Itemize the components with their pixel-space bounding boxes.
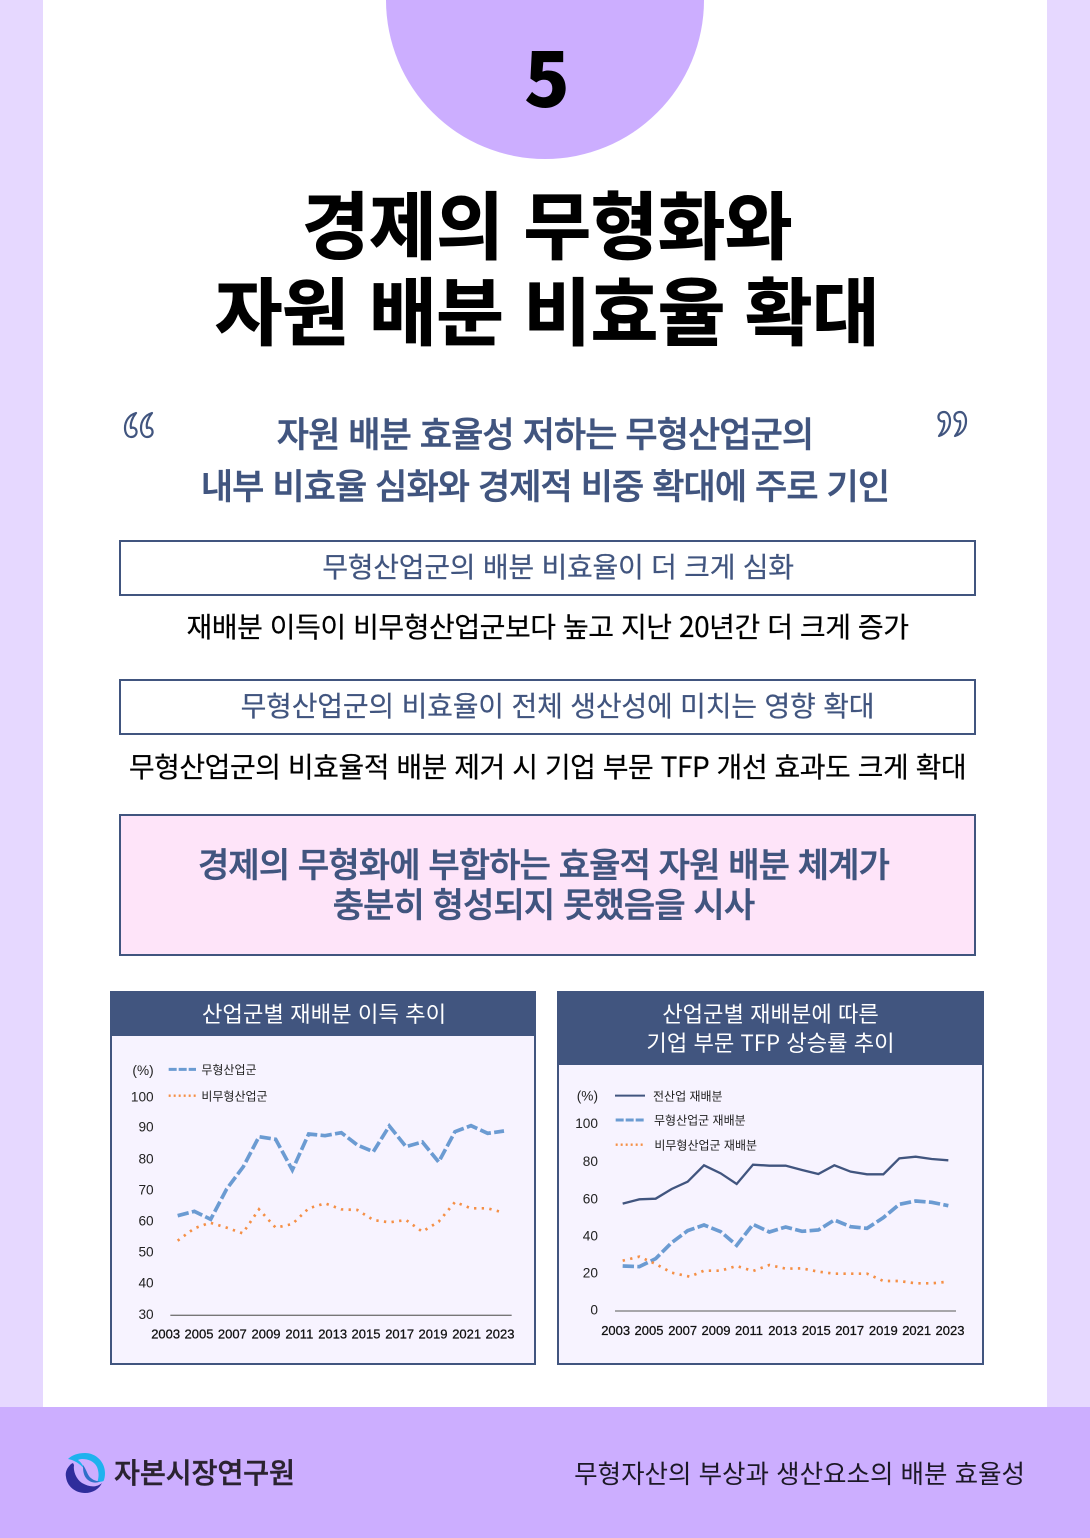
y axis labels: 0	[590, 1302, 598, 1317]
icon: opening quote	[124, 412, 154, 438]
title	[215, 169, 879, 361]
x axis labels: 2019	[419, 1326, 447, 1341]
legend	[169, 1063, 268, 1103]
series: non-intangible industries	[623, 1257, 948, 1283]
x axis labels: 2017	[835, 1323, 864, 1338]
x axis labels: 2003	[601, 1323, 630, 1338]
x axis labels: 2005	[635, 1323, 663, 1338]
y axis labels: 60	[583, 1191, 598, 1206]
y axis labels: (%)	[577, 1089, 598, 1104]
left chart heading: 산업군별 재배분 이득 추이	[202, 997, 446, 1029]
legend: 비무형산업군	[201, 1089, 268, 1103]
y axis labels: 100	[575, 1116, 598, 1131]
x axis labels: 2009	[702, 1323, 730, 1338]
legend: 비무형산업군 재배분	[654, 1138, 757, 1152]
x axis labels: 2015	[802, 1323, 831, 1338]
y axis labels: 50	[138, 1245, 154, 1260]
circle badge with number 5: 5	[524, 20, 570, 129]
x axis labels: 2007	[668, 1323, 697, 1338]
title: 자원 배분 비효율 확대	[215, 255, 879, 361]
y axis labels: 40	[583, 1228, 598, 1243]
panel: right chart	[557, 991, 984, 1365]
left chart heading	[110, 991, 536, 1036]
x axis labels: 2007	[218, 1326, 247, 1341]
icon: closing quote	[937, 410, 968, 438]
x axis labels: 2005	[185, 1326, 213, 1341]
y axis labels: 100	[131, 1089, 154, 1104]
y axis labels: 80	[583, 1154, 598, 1169]
x axis labels: 2015	[352, 1326, 380, 1341]
x axis labels: 2011	[285, 1326, 313, 1341]
x axis labels	[601, 1323, 964, 1338]
outlined heading 2: 무형산업군의 비효율이 전체 생산성에 미치는 영향 확대	[241, 684, 874, 724]
y axis labels	[575, 1089, 598, 1317]
text line 1: 재배분 이득이 비무형산업군보다 높고 지난 20년간 더 크게 증가	[186, 606, 909, 646]
quote text: 자원 배분 효율성 저하는 무형산업군의	[277, 407, 813, 458]
y axis labels: (%)	[132, 1063, 154, 1078]
x axis labels: 2003	[151, 1326, 180, 1341]
x axis labels: 2013	[318, 1326, 347, 1341]
legend: 무형산업군	[201, 1063, 257, 1077]
right chart heading	[557, 991, 984, 1065]
y axis labels	[131, 1063, 154, 1322]
outlined heading 1	[119, 540, 976, 596]
series: non-intangible industries	[178, 1202, 500, 1241]
x axis labels: 2011	[735, 1323, 763, 1338]
x axis labels: 2017	[385, 1326, 414, 1341]
footer band	[0, 1407, 1090, 1538]
series: intangible industries	[623, 1201, 948, 1267]
x axis labels: 2023	[936, 1323, 964, 1338]
circle badge with number 5	[386, 0, 704, 159]
x axis labels: 2009	[252, 1326, 280, 1341]
x axis labels: 2021	[902, 1323, 931, 1338]
legend	[615, 1089, 757, 1152]
y axis labels: 60	[138, 1213, 154, 1228]
series: intangible industries	[178, 1126, 504, 1219]
legend: 전산업 재배분	[653, 1089, 723, 1103]
y axis labels: 20	[583, 1265, 598, 1280]
quote text	[201, 407, 889, 510]
organisation name: 자본시장연구원	[114, 1451, 295, 1492]
callout: 경제의 무형화에 부합하는 효율적 자원 배분 체계가	[198, 838, 889, 887]
right chart heading: 산업군별 재배분에 따른	[662, 997, 879, 1029]
x axis labels: 2021	[452, 1326, 481, 1341]
y axis labels: 70	[138, 1183, 154, 1198]
legend: 무형산업군 재배분	[654, 1114, 746, 1128]
report title: 무형자산의 부상과 생산요소의 배분 효율성	[574, 1454, 1025, 1491]
outlined heading 2	[119, 678, 976, 734]
x axis labels: 2023	[486, 1326, 514, 1341]
panel: left chart	[110, 991, 536, 1365]
y axis labels: 90	[138, 1120, 154, 1135]
quote text: 내부 비효율 심화와 경제적 비중 확대에 주로 기인	[201, 459, 889, 510]
line chart: redistribution gain	[131, 1063, 514, 1341]
outlined heading 1: 무형산업군의 배분 비효율이 더 크게 심화	[322, 546, 794, 586]
x axis labels	[151, 1326, 514, 1341]
text line 2: 무형산업군의 비효율적 배분 제거 시 기업 부문 TFP 개선 효과도 크게 확대	[129, 746, 966, 786]
y axis labels: 30	[138, 1307, 154, 1322]
y axis labels: 80	[138, 1151, 154, 1166]
x axis labels: 2013	[768, 1323, 797, 1338]
line chart: TFP growth	[575, 1089, 964, 1338]
y axis labels: 40	[138, 1276, 154, 1291]
title: 경제의 무형화와	[302, 169, 792, 275]
right chart heading: 기업 부문 TFP 상승률 추이	[646, 1026, 895, 1058]
callout	[119, 814, 976, 956]
x axis labels: 2019	[869, 1323, 898, 1338]
callout: 충분히 형성되지 못했음을 시사	[333, 878, 754, 927]
series: all industries	[623, 1157, 948, 1204]
icon: logo	[66, 1453, 105, 1493]
